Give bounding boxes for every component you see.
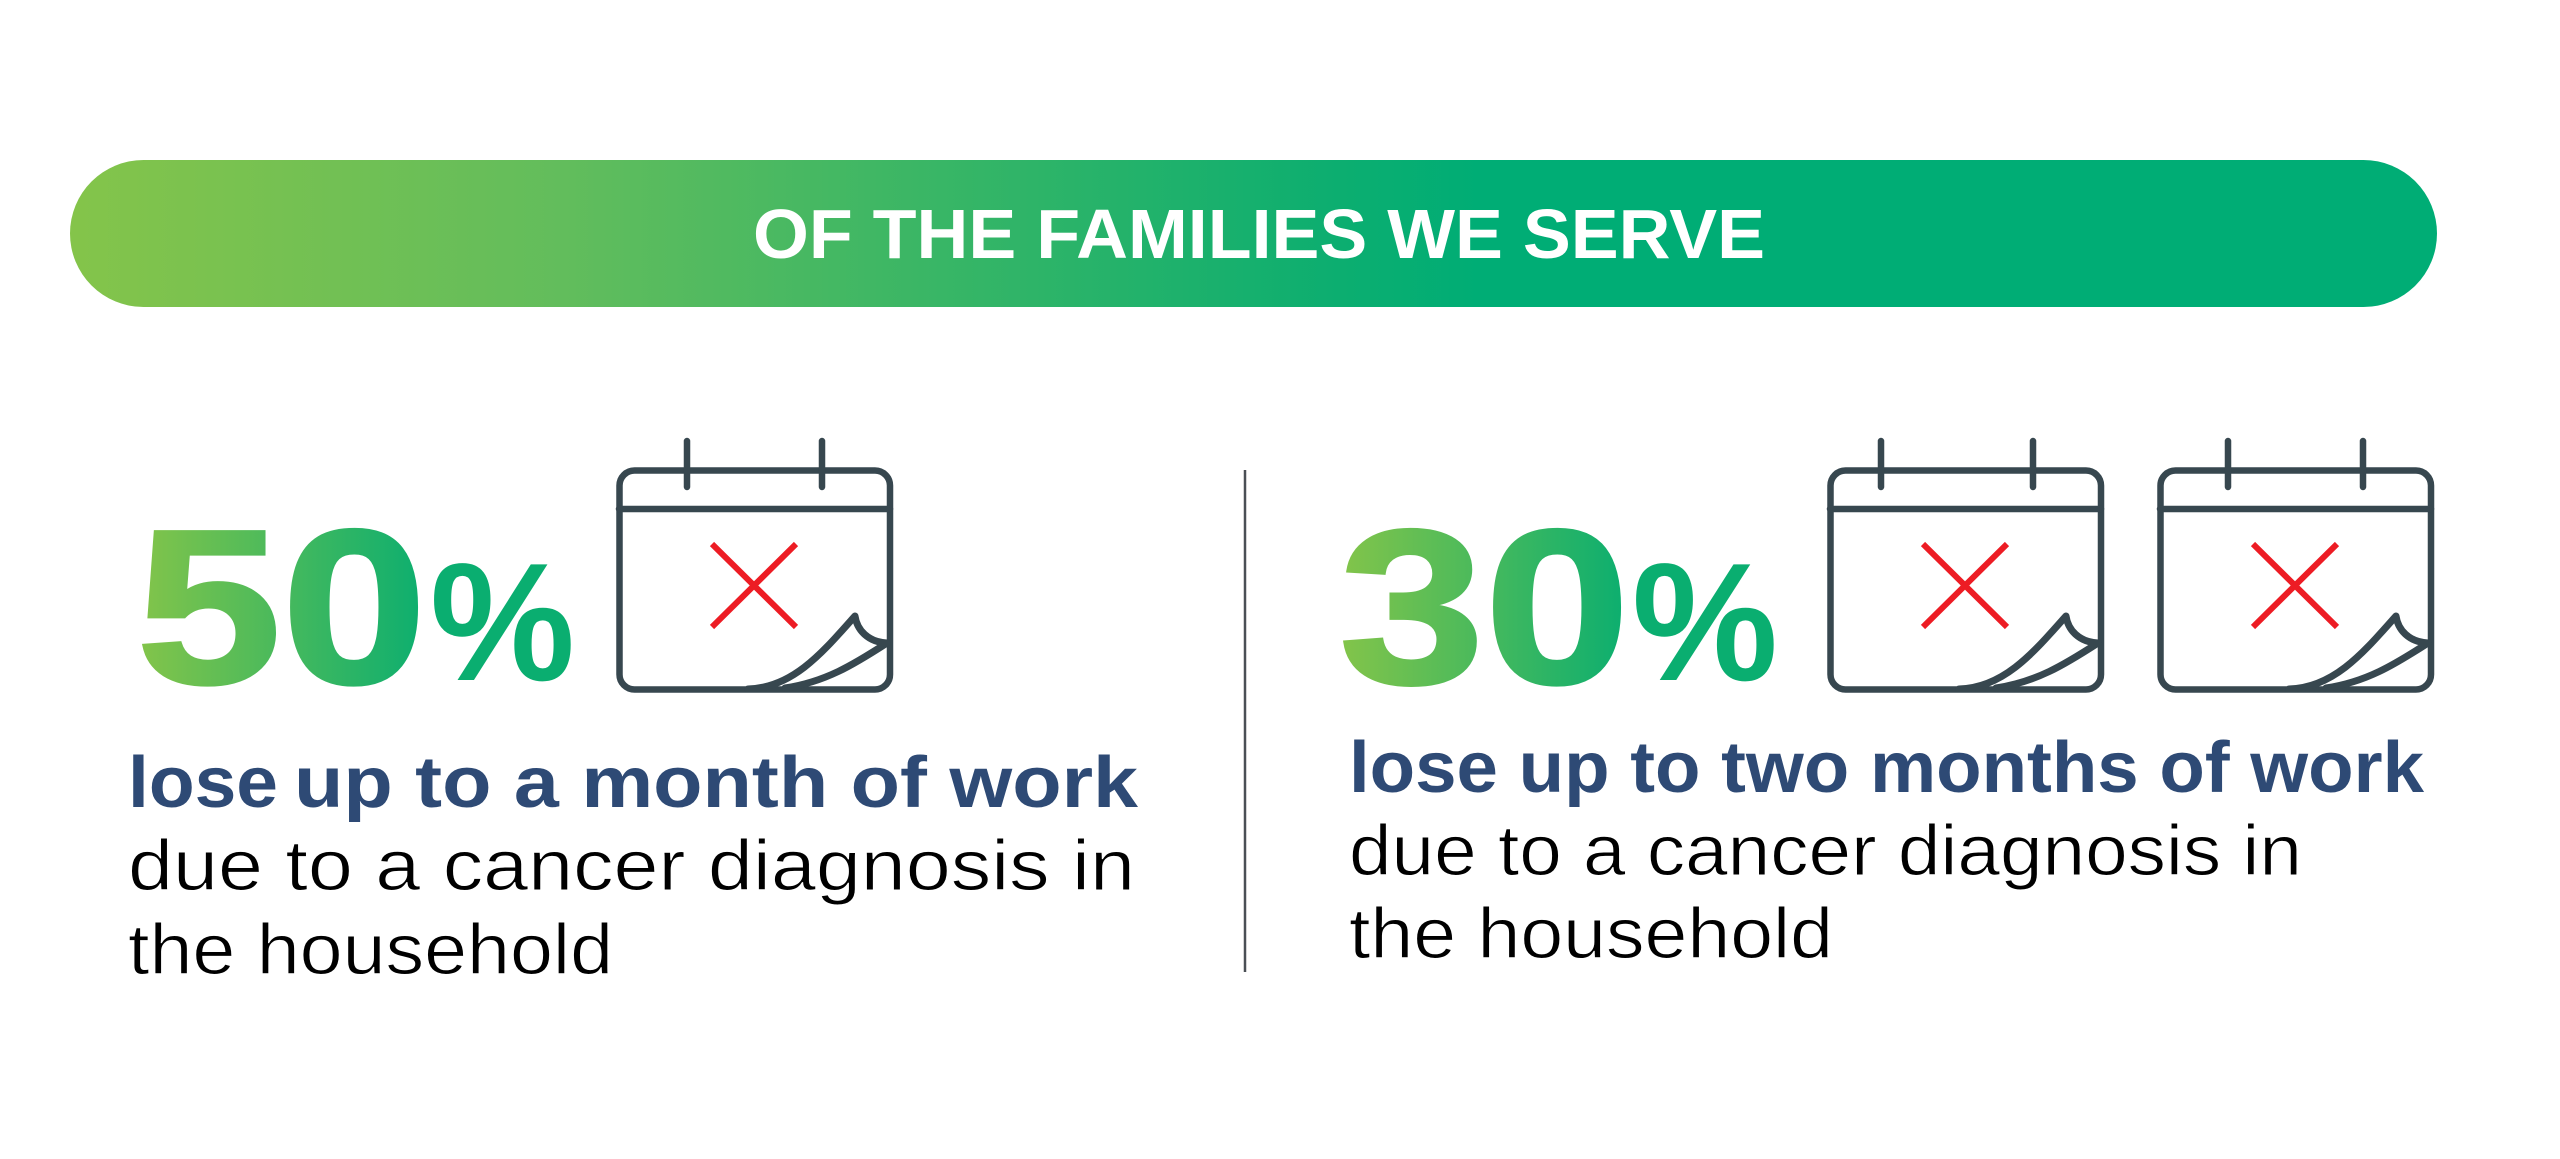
- big number 50%: 50: [136, 484, 427, 730]
- icon: calendar with cross, second: [2160, 441, 2431, 690]
- panel: 30 percent statistic: [1339, 441, 2431, 974]
- big number 30%: %: [1632, 528, 1778, 716]
- header banner: [70, 160, 2437, 307]
- divider: [1244, 470, 1246, 972]
- stat text: two months: [1349, 728, 2425, 974]
- stat text: two months: lose up to two months of work: [1349, 728, 2425, 808]
- stat text: two months: the household: [1349, 895, 1833, 974]
- big number 50%: [136, 484, 575, 730]
- icon: calendar with cross: [619, 441, 890, 690]
- stat text: one month: due to a cancer diagnosis in: [128, 827, 1135, 906]
- banner heading: OF THE FAMILIES WE SERVE: [753, 195, 1765, 273]
- stat text: two months: due to a cancer diagnosis in: [1349, 812, 2302, 891]
- stat text: one month: [128, 743, 1139, 990]
- icon: calendar with cross, first: [1830, 441, 2101, 690]
- big number 30%: [1339, 484, 1778, 730]
- stat text: one month: the household: [128, 911, 613, 990]
- stat text: one month: up to a month of work: [294, 743, 1139, 823]
- panel: 50 percent statistic: [128, 441, 1139, 990]
- big number 30%: 30: [1339, 484, 1630, 730]
- big number 50%: %: [430, 528, 575, 716]
- stat text: one month: lose: [128, 743, 278, 823]
